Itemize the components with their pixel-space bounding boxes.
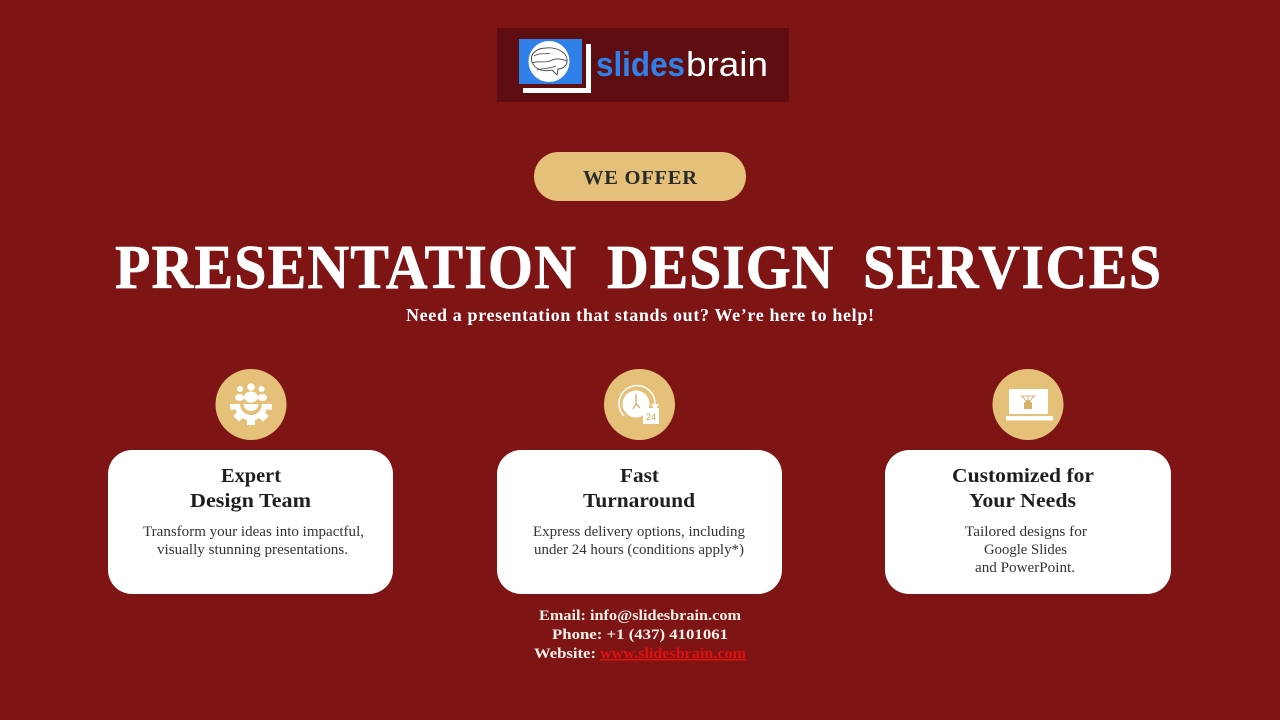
card heading: Customized for	[952, 465, 1094, 487]
card heading	[952, 465, 1094, 512]
icon: team and gear	[216, 369, 286, 440]
logo: slidesbrain: slides	[596, 46, 685, 84]
title	[115, 233, 1161, 303]
title: PRESENTATION	[115, 233, 576, 303]
contact details: Phone: +1 (437) 4101061	[552, 627, 728, 643]
contact details: Website:	[534, 646, 596, 662]
icon: clock and calendar: 24	[646, 412, 656, 422]
card body: under 24 hours (conditions apply*)	[534, 542, 744, 558]
contact details	[534, 608, 747, 662]
panel: expert design team	[108, 369, 393, 594]
card body: Express delivery options, including	[533, 524, 745, 540]
title: DESIGN	[607, 233, 833, 303]
logo: slidesbrain: brain	[686, 46, 768, 84]
card heading	[190, 465, 311, 512]
card heading: Turnaround	[583, 490, 695, 512]
title: SERVICES	[863, 233, 1161, 303]
card heading: Fast	[620, 465, 659, 487]
contact details: Email: info@slidesbrain.com	[539, 608, 742, 624]
card heading: Design Team	[190, 490, 311, 512]
panel: fast turnaround	[497, 369, 782, 594]
card body	[533, 524, 745, 558]
icon: clock and calendar	[604, 369, 675, 440]
card body: Google Slides	[984, 542, 1067, 558]
card heading: Your Needs	[969, 490, 1076, 512]
card body	[143, 524, 364, 558]
card body: and PowerPoint.	[975, 560, 1075, 576]
card heading	[583, 465, 695, 512]
card body	[965, 524, 1087, 576]
card body: Transform your ideas into impactful,	[143, 524, 364, 540]
panel: customized for your needs	[885, 369, 1171, 594]
subtitle: Need a presentation that stands out? We’re here to help!	[406, 305, 874, 325]
card	[108, 450, 393, 594]
card heading: Expert	[221, 465, 281, 487]
card body: Tailored designs for	[965, 524, 1087, 540]
card	[885, 450, 1171, 594]
badge: we offer	[534, 152, 746, 201]
card body: visually stunning presentations.	[157, 542, 348, 558]
contact details: www.slidesbrain.com	[600, 646, 747, 662]
badge: we offer: WE OFFER	[583, 167, 697, 189]
card	[497, 450, 782, 594]
logo: slidesbrain	[497, 28, 789, 102]
icon: laptop	[992, 369, 1064, 440]
